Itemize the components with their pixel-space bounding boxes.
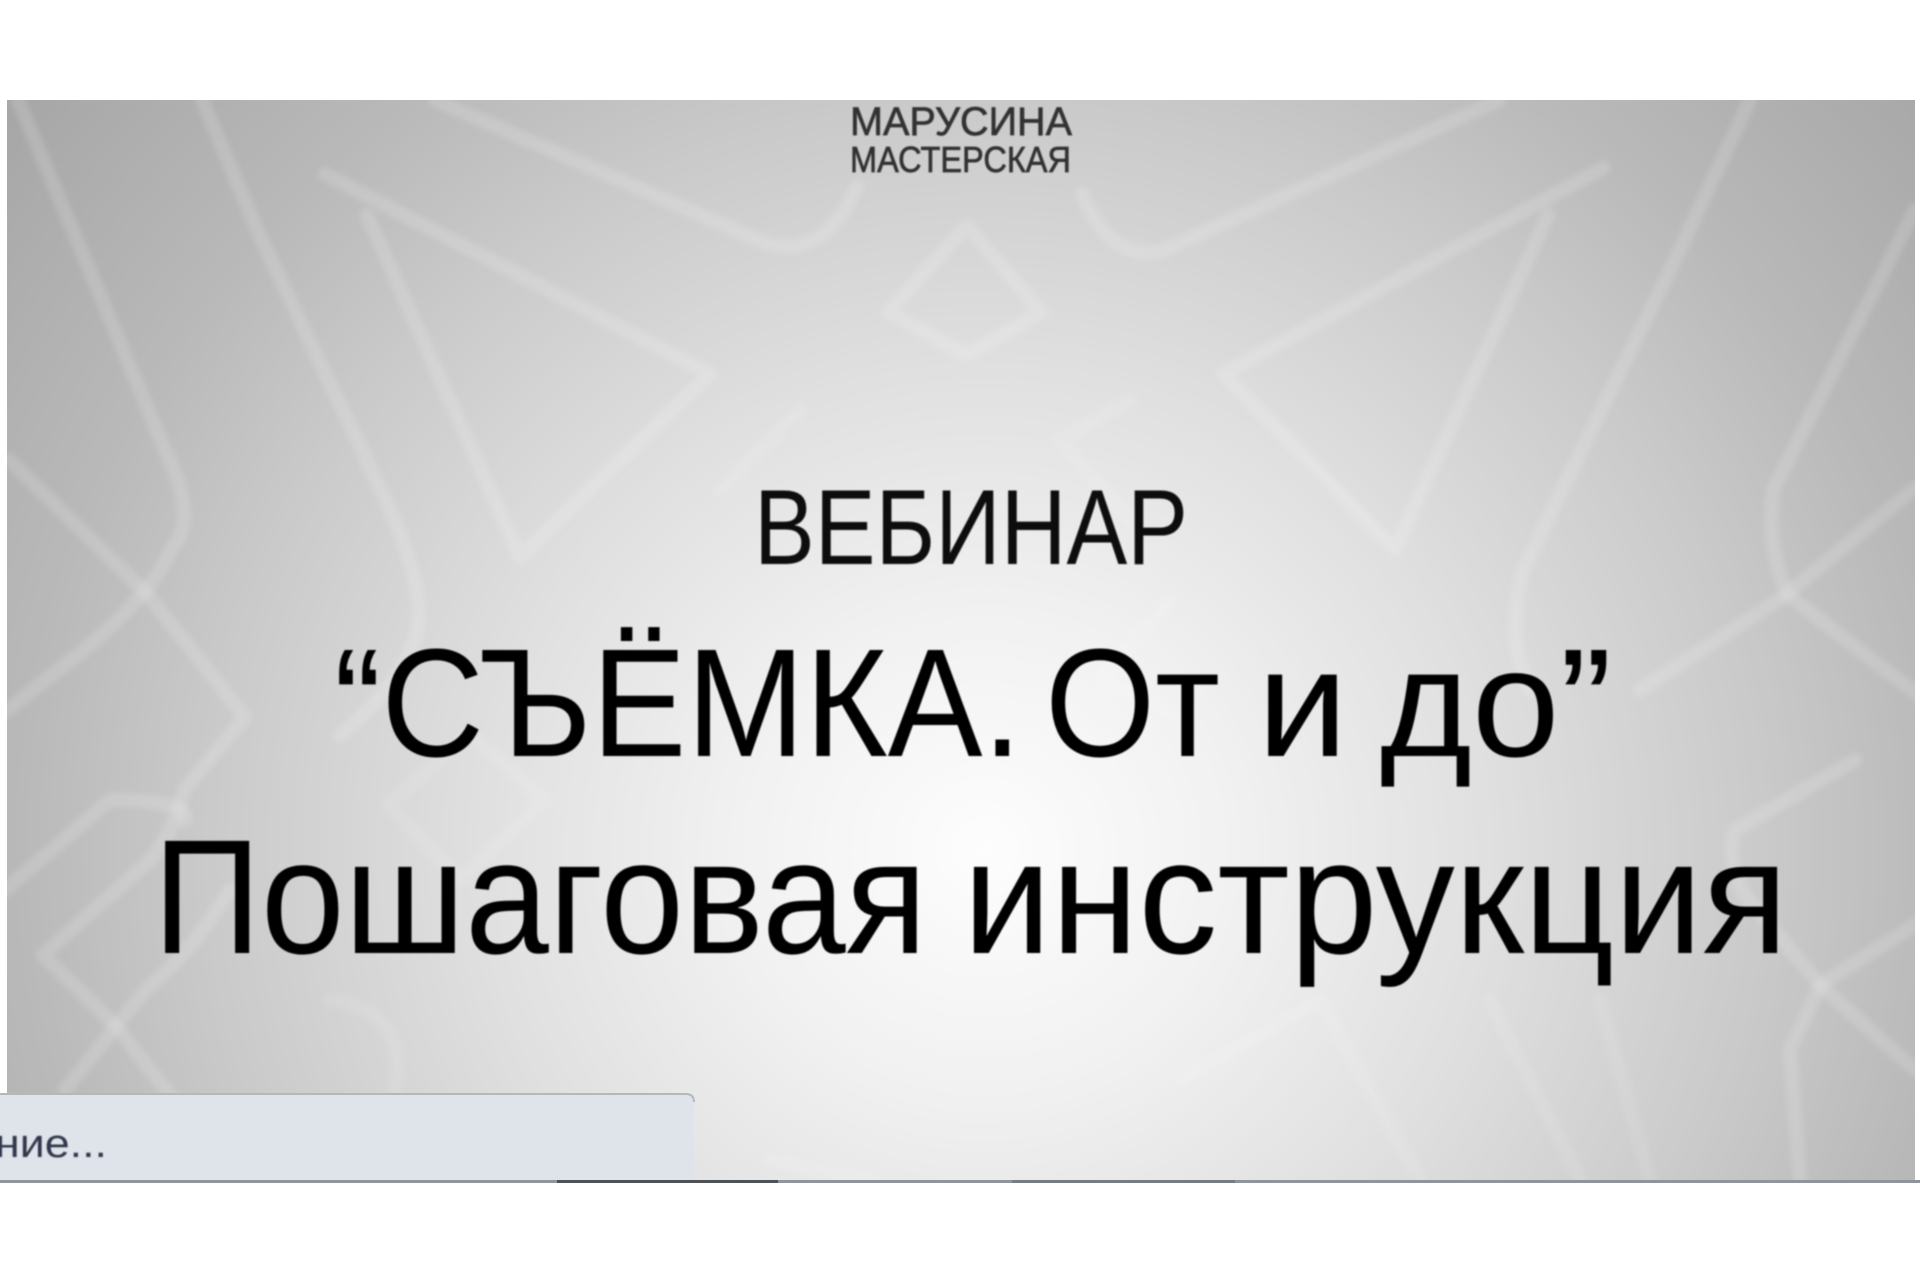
heading: webinar subtitle: Пошаговая (153, 805, 927, 988)
logo: Марусина мастерская (850, 100, 1072, 180)
ornament: faint central pattern (330, 400, 1650, 1180)
heading: webinar title: до” (1380, 617, 1612, 789)
logo: Марусина мастерская: МАРУСИНА (850, 100, 1072, 144)
window bottom edge (0, 1180, 1920, 1183)
heading: webinar title: и (1257, 617, 1348, 789)
logo: Марусина мастерская: МАСТЕРСКАЯ (850, 139, 1071, 180)
heading: webinar title: “СЪЁМКА. (334, 617, 1022, 789)
heading: webinar label: ВЕБИНАР (754, 467, 1188, 587)
heading: webinar title: От (1045, 617, 1220, 789)
status tooltip (0, 1094, 694, 1181)
heading: webinar subtitle: инструкция (963, 805, 1788, 988)
